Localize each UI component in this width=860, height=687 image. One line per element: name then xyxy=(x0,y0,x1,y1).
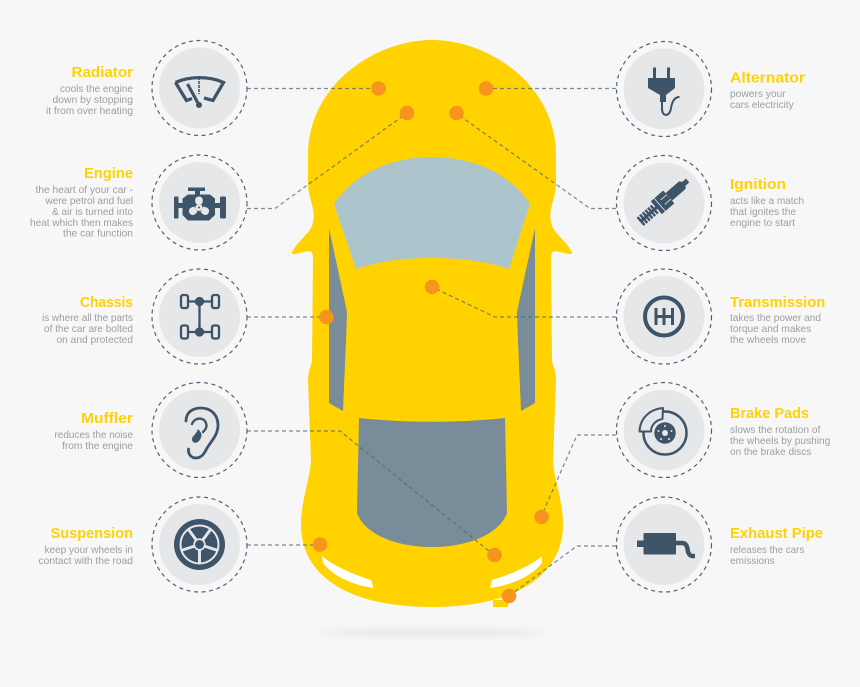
radiator text: Radiator xyxy=(72,64,133,81)
suspension text xyxy=(38,525,133,567)
left headlight xyxy=(322,556,374,588)
brake pads text xyxy=(730,405,831,458)
ignition item xyxy=(616,156,804,250)
transmission item xyxy=(616,269,825,364)
transmission text xyxy=(730,294,825,346)
exhaust pipe text: Exhaust Pipe xyxy=(730,525,823,542)
marker dots xyxy=(313,81,549,603)
number plate xyxy=(493,600,508,607)
icon: plug xyxy=(648,68,680,115)
alternator text: cars electricity xyxy=(730,100,795,111)
alternator text: Alternator xyxy=(730,70,805,86)
chassis text: Chassis xyxy=(80,294,133,311)
car shadow xyxy=(318,629,546,637)
brake pads text: Brake Pads xyxy=(730,405,809,422)
muffler text xyxy=(54,410,133,452)
car illustration xyxy=(292,40,572,607)
transmission text: torque and makes xyxy=(730,324,811,335)
exhaust pipe text xyxy=(730,525,823,567)
engine text: were petrol and fuel xyxy=(45,196,133,207)
icon: wheel xyxy=(174,519,225,570)
transmission text: the wheels move xyxy=(730,335,806,346)
icon: exhaust xyxy=(637,533,695,556)
right side window xyxy=(517,228,535,411)
chassis text: of the car are bolted xyxy=(44,324,133,335)
radiator text xyxy=(46,64,133,117)
ignition text xyxy=(730,176,804,229)
ignition text: Ignition xyxy=(730,176,786,193)
exhaust pipe text: releases the cars xyxy=(730,545,804,556)
transmission text: Transmission xyxy=(730,294,825,311)
right headlight xyxy=(490,556,542,588)
brake pads item xyxy=(616,382,831,478)
icon: engine xyxy=(174,188,226,220)
alternator text xyxy=(730,70,805,111)
left side window xyxy=(329,228,347,411)
brake pads text: slows the rotation of xyxy=(730,425,820,436)
radiator text: cools the engine xyxy=(60,84,133,95)
engine item xyxy=(30,155,247,250)
alternator text: powers your xyxy=(730,89,786,100)
icon: brake disc xyxy=(640,408,686,454)
ignition text: engine to start xyxy=(730,218,795,229)
chassis item xyxy=(42,269,247,364)
suspension item xyxy=(38,497,247,592)
icon: chassis xyxy=(181,295,219,338)
muffler text: from the engine xyxy=(62,441,133,452)
suspension text: Suspension xyxy=(50,525,133,542)
icon: gear shift xyxy=(645,298,683,336)
engine text xyxy=(30,165,133,240)
muffler item xyxy=(54,382,247,478)
radiator text: it from over heating xyxy=(46,106,133,117)
ignition text: acts like a match xyxy=(730,196,804,207)
muffler text: reduces the noise xyxy=(54,430,133,441)
suspension text: keep your wheels in xyxy=(44,545,133,556)
engine text: the heart of your car - xyxy=(36,185,133,196)
car body xyxy=(292,40,572,607)
radiator text: down by stopping xyxy=(52,95,133,106)
icon: spark plug xyxy=(635,174,693,228)
exhaust pipe item xyxy=(616,497,823,592)
engine text: Engine xyxy=(84,165,133,182)
icon: wiper xyxy=(176,77,224,108)
chassis text: is where all the parts xyxy=(42,313,133,324)
radiator item xyxy=(46,40,247,136)
brake pads text: the wheels by pushing xyxy=(730,436,831,447)
rear window xyxy=(357,418,507,547)
brake pads text: on the brake discs xyxy=(730,447,811,458)
muffler text: Muffler xyxy=(81,410,133,427)
engine text: & air is turned into xyxy=(52,207,133,218)
engine text: heat which then makes xyxy=(30,218,133,229)
transmission text: takes the power and xyxy=(730,313,821,324)
ignition text: that ignites the xyxy=(730,207,796,218)
chassis text xyxy=(42,294,133,346)
chassis text: on and protected xyxy=(56,335,133,346)
icon: ear xyxy=(186,408,218,458)
alternator item xyxy=(616,42,805,136)
connector lines xyxy=(247,88,616,596)
engine text: the car function xyxy=(63,228,133,240)
suspension text: contact with the road xyxy=(38,556,133,567)
windshield xyxy=(334,157,530,269)
exhaust pipe text: emissions xyxy=(730,556,775,567)
